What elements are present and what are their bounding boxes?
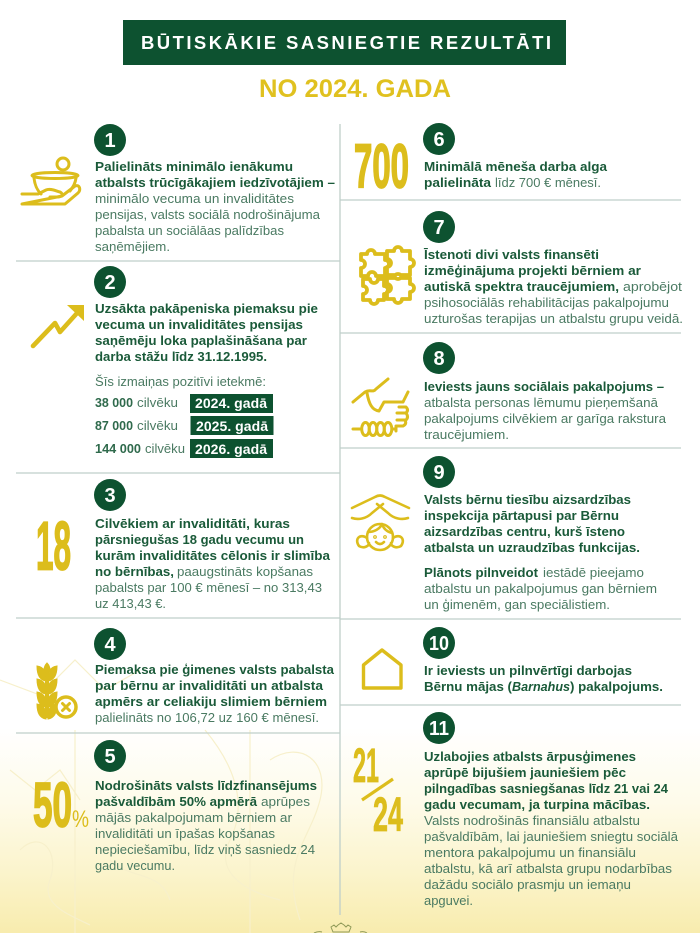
table row: 2024: 2024. gadā xyxy=(195,395,267,411)
text: item 5: nepieciešamību, līdz viņš sasniedz 24 xyxy=(95,842,315,857)
panel: item 6 xyxy=(354,123,608,202)
text: item 3 xyxy=(95,516,331,611)
number badge 4 xyxy=(94,628,126,660)
number badge 11: 11 xyxy=(429,718,449,740)
number badge 10 xyxy=(423,627,455,659)
text: item 7: autiskā spektra traucējumiem, xyxy=(424,279,619,294)
number badge 2: 2 xyxy=(104,272,116,294)
panel: item 7 xyxy=(361,211,683,326)
text: item 10 xyxy=(424,663,663,694)
number badge 5: 5 xyxy=(104,746,116,768)
text: item 2: saņēmēju loka paplašināšana par xyxy=(95,333,307,348)
text: item 6: palielināta xyxy=(424,175,492,190)
text: item 9: atbalsta un uzraudzības funkcijas. xyxy=(424,540,640,555)
text: item 5: aprūpes xyxy=(261,794,311,809)
emblem at bottom xyxy=(314,923,367,933)
big number 21/24: 21 xyxy=(353,740,379,793)
text: item 11: gadu vecumam, ja turpina mācības. xyxy=(424,797,650,812)
text: item 9: Valsts bērnu tiesību aizsardzības xyxy=(424,492,631,507)
text: item 4: palielināts no 106,72 uz 160 € mēnesī. xyxy=(95,710,319,725)
icon: supporting hands xyxy=(353,379,408,436)
text: item 4: apmērs ar celiakiju slimiem bērniem xyxy=(95,694,327,709)
text: item 9: atbalstu un pakalpojumus gan bērniem xyxy=(424,581,657,596)
big number 50%: 50 xyxy=(33,770,72,840)
text: item 8: traucējumiem. xyxy=(424,427,509,442)
title banner: BŪTISKĀKIE SASNIEGTIE REZULTĀTI xyxy=(141,32,551,53)
faint emblem background ornament xyxy=(0,660,322,933)
text: item 11: atbalstu, kā arī atbalsta grupu nodarbības xyxy=(424,861,673,876)
icon: rising arrow xyxy=(33,305,84,346)
number badge 6 xyxy=(423,123,455,155)
text: item 6: Minimālā mēneša darba alga xyxy=(424,159,608,174)
text: item 5: invaliditāti un īpašas kopšanas xyxy=(95,826,275,841)
number badge 4: 4 xyxy=(104,634,116,656)
text: item 11: dažādu sociālo prasmju un iemaņu xyxy=(424,877,631,892)
text: item 10: ) pakalpojums. xyxy=(570,679,663,694)
text: item 3: paaugstināts kopšanas xyxy=(177,564,314,579)
table row: 2026: 2026. gadā xyxy=(195,441,267,457)
text: item 11: aprūpē bijušiem jauniešiem pēc xyxy=(424,765,626,780)
text: item 8: pakalpojums cilvēkiem ar garīga rakstura xyxy=(424,411,667,426)
text: item 1: Palielināts minimālo ienākumu xyxy=(95,159,293,174)
text: item 2: darba stāžu līdz 31.12.1995. xyxy=(95,349,267,364)
text: item 9: aizsardzības centru, kurš īsteno xyxy=(424,524,625,539)
text: item 11 xyxy=(424,749,679,908)
text: item 11: apguvei. xyxy=(424,893,473,908)
number badge 7: 7 xyxy=(433,217,445,239)
number badge 9: 9 xyxy=(433,462,445,484)
text: item 5 xyxy=(95,778,317,873)
number badge 11 xyxy=(423,712,455,744)
text: item 9 xyxy=(424,492,657,612)
number badge 9 xyxy=(423,456,455,488)
text: item 9: iestādē pieejamo xyxy=(543,565,644,580)
text: item 10: Ir ieviests un pilnvērtīgi darbojas xyxy=(424,663,632,678)
text: item 7: izmēģinājuma projekti bērniem ar xyxy=(424,263,641,278)
number badge 8 xyxy=(423,342,455,374)
table row: 2025: 87 000 xyxy=(95,418,133,433)
text: item 9: Plānots pilnveidot xyxy=(424,565,539,580)
panel: item 11 xyxy=(353,712,679,908)
text: item 1: saņēmējiem. xyxy=(95,239,170,254)
text: item 7: uzturošas terapijas un atbalstu grupu veidā. xyxy=(424,311,683,326)
panel: item 9 xyxy=(352,456,657,612)
text: item 5: pašvaldībām 50% apmērā xyxy=(95,794,258,809)
table row: 2026: cilvēku xyxy=(145,441,185,456)
text: item 1: atbalsts trūcīgākajiem iedzīvotājiem – xyxy=(95,175,335,190)
text: item 9: inspekcija pārtapusi par Bērnu xyxy=(424,508,619,523)
panel: item 2 xyxy=(33,266,318,458)
table row: 2026 xyxy=(95,439,273,458)
text: item 3: kurām invaliditātes cēlonis ir slimība xyxy=(95,548,331,563)
panel: item 4 xyxy=(37,628,335,725)
text: item 1: pensijas, valsts sociālā nodrošinājuma xyxy=(95,207,321,222)
big number 700: 700 xyxy=(354,132,409,202)
table row: 2025 xyxy=(95,416,274,435)
panel: item 5 xyxy=(33,740,317,873)
text: item 3: pabalsts par 100 € mēnesī – no 313,43 xyxy=(95,580,322,595)
text: item 5: Nodrošināts valsts līdzfinansējums xyxy=(95,778,317,793)
number badge 1 xyxy=(94,124,126,156)
big number 21/24: 24 xyxy=(373,789,403,842)
text: item 10: Barnahus xyxy=(512,679,570,694)
text: item 11: Valsts nodrošinās finansiālu atbalstu xyxy=(424,813,640,828)
text: item 11: mentora pakalpojumu un finansiālu xyxy=(424,845,636,860)
text: item 5: gadu vecumu. xyxy=(95,858,175,873)
panel: item 8 xyxy=(353,342,667,442)
text: item 7 xyxy=(423,247,683,326)
text: item 7: psihosociālās rehabilitācijas pakalpojumu xyxy=(424,295,669,310)
text: item 4: par bērnu ar invaliditāti un atbalsta xyxy=(95,678,324,693)
text: item 11: pašvaldībām, lai jauniešiem sniegtu sociālā xyxy=(424,829,679,844)
icon: puzzle pieces xyxy=(361,247,414,304)
text: item 6 xyxy=(424,159,608,190)
text: item 6: līdz 700 € mēnesī. xyxy=(495,175,601,190)
number badge 6: 6 xyxy=(433,129,445,151)
table row: 2026: 144 000 xyxy=(95,441,141,456)
icon: child under protecting hands xyxy=(352,496,409,550)
text: item 7: aprobējot xyxy=(623,279,682,294)
text: item 9: un ģimenēm, gan speciālistiem. xyxy=(424,597,610,612)
text: item 5: mājās pakalpojumam bērniem ar xyxy=(95,810,293,825)
text: item 8 xyxy=(424,379,667,442)
icon: wheat with crossed circle xyxy=(37,663,76,719)
text: item 2: vecuma un invaliditātes pensijas xyxy=(95,317,303,332)
panel: item 3: 18 xyxy=(36,508,71,584)
text: item 11: pilngadības sasniegšanas līdz 21 vai 24 xyxy=(424,781,669,796)
number badge 8: 8 xyxy=(433,348,445,370)
text: item 4: Piemaksa pie ģimenes valsts pabalsta xyxy=(95,662,335,677)
text: item 4 xyxy=(95,662,335,725)
text: item 7: Īstenoti divi valsts finansēti xyxy=(423,247,599,262)
subtitle: NO 2024. GADA xyxy=(259,75,451,103)
panel: item 3 xyxy=(36,479,331,611)
table row: 2025: cilvēku xyxy=(137,418,178,433)
text: item 2: Uzsākta pakāpeniska piemaksu pie xyxy=(95,301,318,316)
table row: 2024 xyxy=(95,394,273,413)
number badge 7 xyxy=(423,211,455,243)
number badge 3 xyxy=(94,479,126,511)
text: item 2: Šīs izmaiņas pozitīvi ietekmē: xyxy=(95,374,266,389)
panel: item 10 xyxy=(364,627,663,694)
text: item 1: minimālo vecuma un invaliditātes xyxy=(95,191,295,206)
text: item 3: no bērnības, xyxy=(95,564,174,579)
table row: 2024: 38 000 xyxy=(95,395,133,410)
text: item 1: pabalsta un sociālāas palīdzības xyxy=(95,223,284,238)
title banner xyxy=(123,20,566,65)
number badge 2 xyxy=(94,266,126,298)
icon: house xyxy=(364,650,401,688)
table row: 2024: cilvēku xyxy=(137,395,178,410)
number badge 3: 3 xyxy=(104,485,116,507)
text: item 3: uz 413,43 €. xyxy=(95,596,166,611)
text: item 3: pārsniegušas 18 gadu vecumu un xyxy=(95,532,304,547)
panel: item 1 xyxy=(22,124,335,254)
text: item 8: atbalsta personas lēmumu pieņemšanā xyxy=(424,395,659,410)
number badge 1: 1 xyxy=(104,130,116,152)
big number 21/24 xyxy=(353,740,403,842)
text: item 8: Ieviests jauns sociālais pakalpojums – xyxy=(424,379,664,394)
text: item 1 xyxy=(95,159,335,254)
text: item 10: Bērnu mājas ( xyxy=(424,679,513,694)
number badge 10: 10 xyxy=(429,633,449,655)
big number 50%: % xyxy=(72,806,89,833)
text: item 2 xyxy=(95,301,318,389)
table row: 2025: 2025. gadā xyxy=(196,418,268,434)
number badge 5 xyxy=(94,740,126,772)
icon: hand holding bowl and coin xyxy=(22,158,80,204)
text: item 3: Cilvēkiem ar invaliditāti, kuras xyxy=(95,516,290,531)
text: item 11: Uzlabojies atbalsts ārpusģimenes xyxy=(424,749,636,764)
